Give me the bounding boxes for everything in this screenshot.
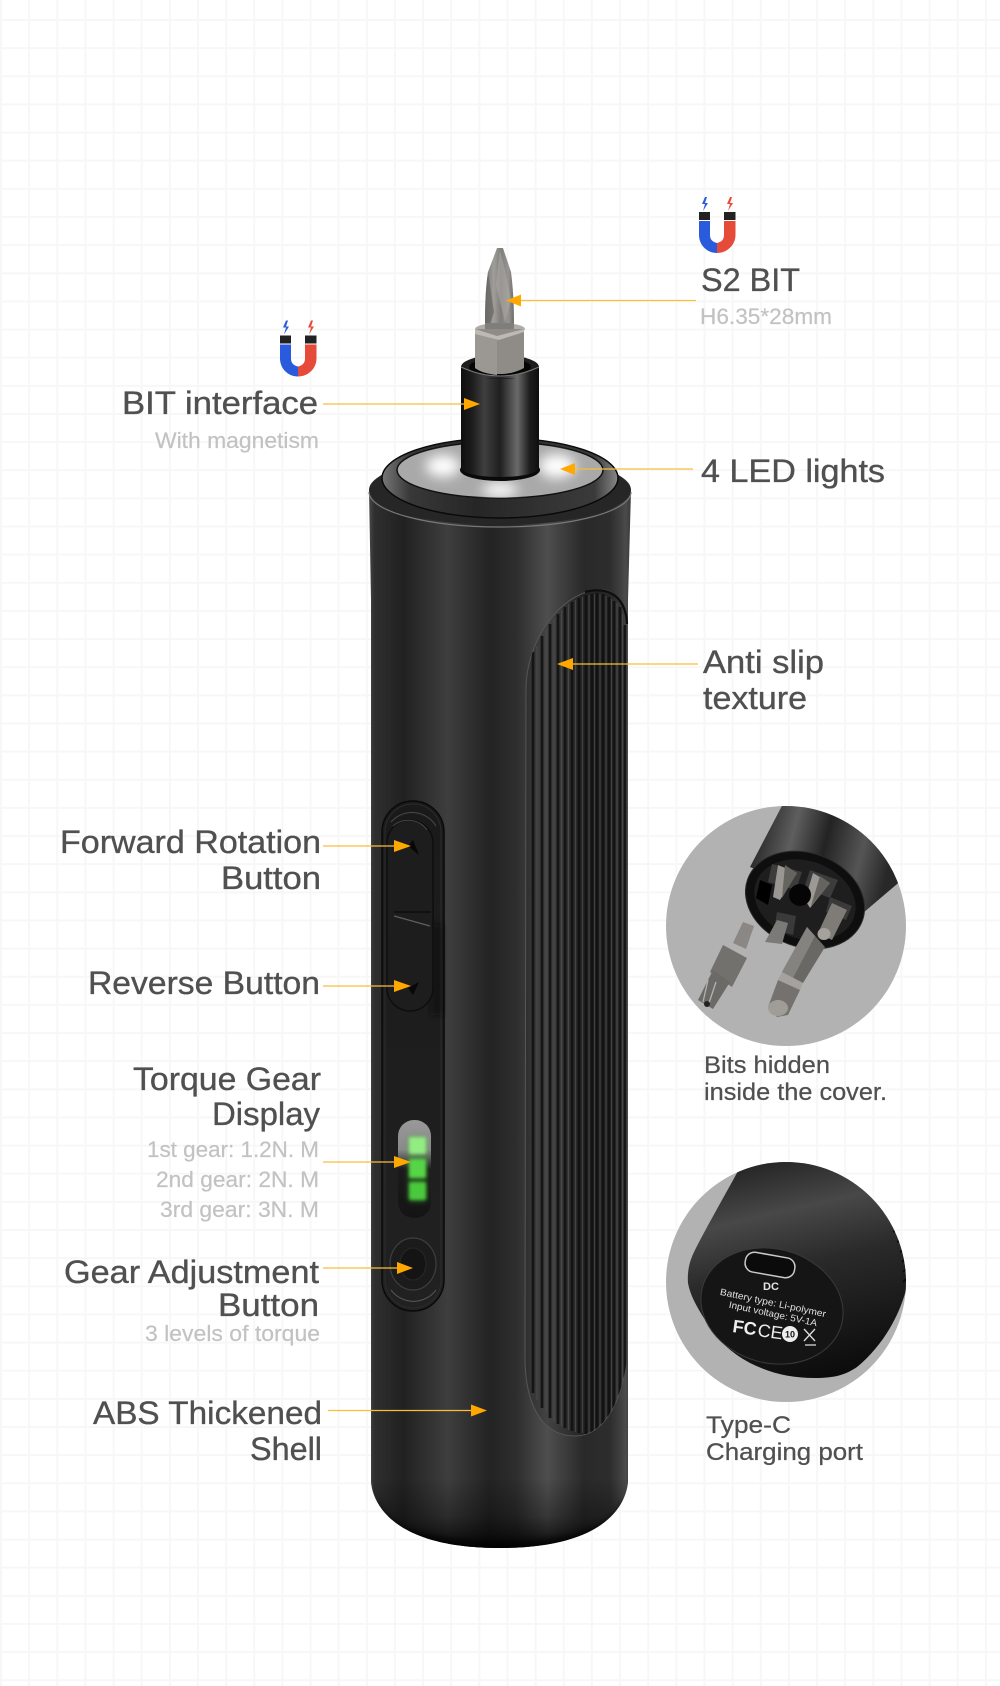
panel: type-c charging port: Charging port [706,1439,863,1466]
base plate: Input voltage: 5V-1A [728,1300,819,1329]
callout: Reverse Button [88,965,411,1001]
panel: bits hidden inside the cover: inside the cover. [704,1079,887,1106]
base plate [688,1232,856,1380]
callout: Gear Adjustment Button: Button [218,1287,319,1323]
callout: Torque Gear Display: 2nd gear: 2N. M [156,1167,319,1192]
gear adjustment button [390,1238,436,1290]
base plate: CE [756,1320,784,1343]
panel: bits hidden inside the cover: Bits hidden [704,1052,830,1079]
screwdriver body [360,490,640,1550]
base plate: FC [731,1316,758,1339]
callout: Torque Gear Display [133,1061,411,1222]
callout: Gear Adjustment Button: Gear Adjustment [64,1254,319,1290]
callout: S2 BIT: H6.35*28mm [700,304,832,329]
panel: type-c charging port: Type-C [706,1412,791,1439]
callout: 4 LED lights: 4 LED lights [701,453,885,489]
button panel [382,801,444,1311]
callout: Anti slip texture [557,644,824,716]
usb-c port [744,1251,796,1279]
callout: Torque Gear Display: Torque Gear [133,1061,321,1097]
callout: ABS Thickened Shell: ABS Thickened [93,1395,322,1431]
torque gear display [398,1120,431,1218]
forward and reverse rocker button [387,820,443,1015]
callout: Reverse Button: Reverse Button [88,965,320,1001]
callout: ABS Thickened Shell: Shell [250,1431,322,1467]
callout: Anti slip texture: texture [703,680,807,716]
stored bits [756,864,852,944]
callout: S2 BIT [506,197,832,329]
S2 bit [461,248,539,378]
callout: Forward Rotation Button: Button [221,860,321,896]
cylinder cover [750,806,898,912]
callout: Gear Adjustment Button: 3 levels of torque [145,1321,320,1346]
callout: 4 LED lights [560,453,885,489]
callout: S2 BIT: S2 BIT [701,262,800,298]
callout: BIT interface [122,320,480,453]
callout: Torque Gear Display: 3rd gear: 3N. M [160,1197,319,1222]
base plate: Battery type: Li-polymer [719,1287,827,1320]
callout: ABS Thickened Shell [93,1395,487,1467]
callout: Torque Gear Display: 1st gear: 1.2N. M [147,1137,319,1162]
side grip ridges [892,1230,906,1282]
callout: Torque Gear Display: Display [212,1096,320,1132]
callout: Gear Adjustment Button [64,1254,413,1346]
base plate: 10 [785,1330,795,1340]
screwdriver product image [360,248,640,1550]
loose bits [698,922,825,1017]
panel: bits hidden inside the cover [666,800,910,1106]
collar and LED light ring [369,438,631,527]
callout: Forward Rotation Button [60,824,411,896]
icon: magnet [699,197,736,253]
bit holder post [460,355,540,481]
icon: magnet [280,320,316,376]
base plate: DC [763,1281,779,1293]
panel: type-c charging port [666,1162,906,1466]
callout: BIT interface: With magnetism [155,428,319,453]
callout: Anti slip texture: Anti slip [703,644,824,680]
callout: BIT interface: BIT interface [122,385,318,421]
callout: Forward Rotation Button: Forward Rotation [60,824,321,860]
screwdriver base [688,1162,906,1378]
anti slip texture panel [525,590,627,1436]
